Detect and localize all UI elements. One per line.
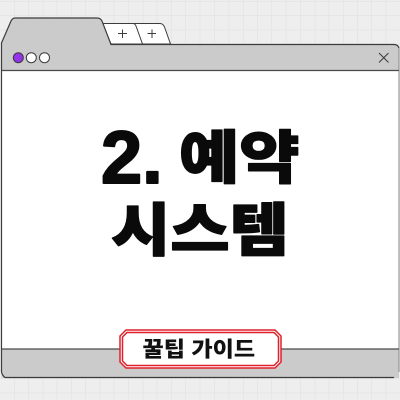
purple dot xyxy=(13,53,23,63)
title line 2: 시스템 xyxy=(111,199,289,263)
white dot xyxy=(26,53,36,63)
title line 1 xyxy=(101,116,300,199)
badge outline xyxy=(120,330,281,368)
inactive tab 2 xyxy=(134,24,170,44)
title line 1: 예약 xyxy=(179,127,300,191)
window control dots xyxy=(13,53,50,63)
icon: plus xyxy=(118,30,127,38)
title xyxy=(101,116,300,263)
inactive tab 1 xyxy=(102,24,142,44)
white dot xyxy=(40,53,50,63)
badge text: 꿀팁 가이드 xyxy=(142,337,255,361)
badge xyxy=(120,330,281,368)
badge inner outline xyxy=(122,332,278,366)
icon: close xyxy=(379,53,388,62)
content panel xyxy=(2,70,399,349)
icon: plus xyxy=(148,30,156,38)
title line 1: 2. xyxy=(101,116,163,199)
